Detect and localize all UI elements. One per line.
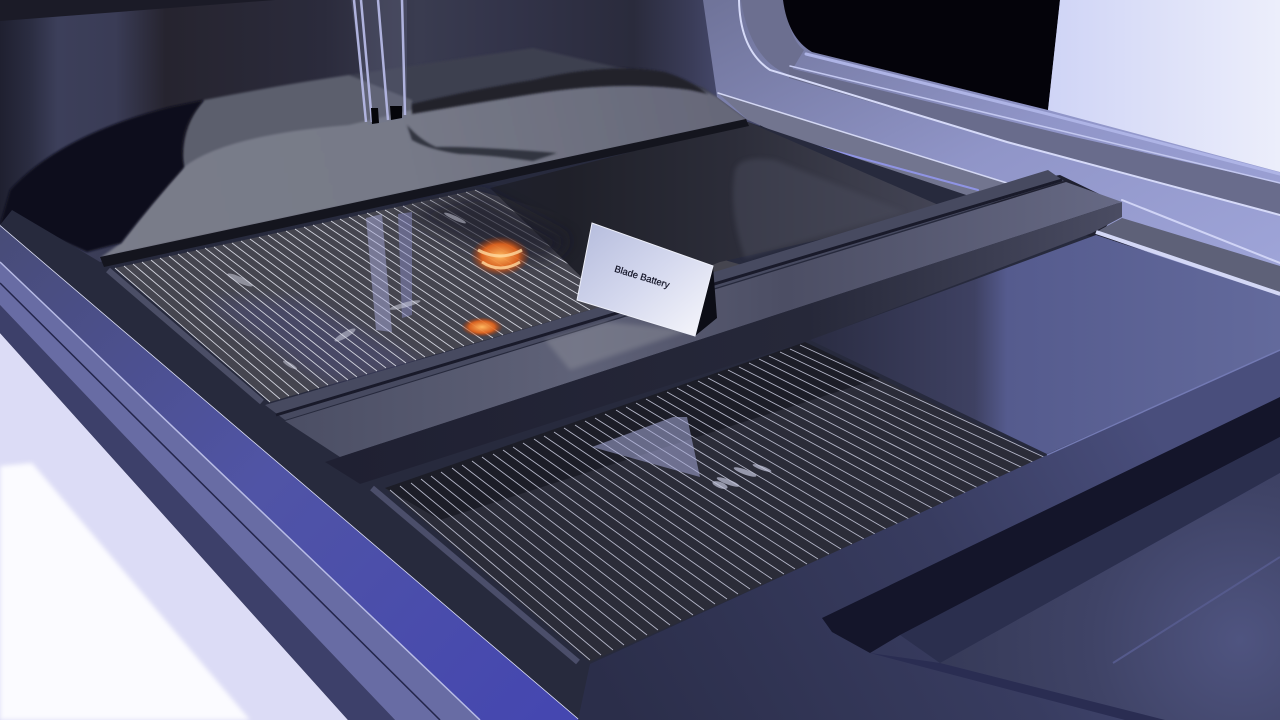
card dark side	[695, 266, 717, 336]
specks	[226, 211, 467, 371]
specks lower	[711, 463, 772, 491]
glass reflection	[733, 159, 905, 258]
frame highlight lines	[0, 225, 580, 720]
back wall	[0, 0, 760, 270]
rear floor dark shadow	[412, 68, 708, 114]
glass tube	[351, 0, 407, 125]
card label: Blade Battery	[613, 264, 671, 291]
panel: upper battery stripes	[115, 190, 760, 402]
crossbar flange	[265, 170, 1064, 420]
reflection of tube	[366, 212, 412, 332]
tube S shadow	[407, 125, 557, 161]
tray interior	[940, 473, 1280, 720]
steel channel	[789, 68, 1280, 215]
panel: lower battery stripes	[385, 342, 1046, 662]
frame band matte	[0, 262, 480, 720]
front surface	[578, 350, 1280, 720]
tray dark wedge	[822, 397, 1280, 653]
bezel beside upper panel	[108, 270, 262, 402]
shadow under bar	[385, 342, 880, 520]
light floor	[100, 72, 748, 258]
right plate	[810, 235, 1280, 454]
dark shadow on the left	[0, 100, 204, 252]
lavender floor	[0, 333, 348, 720]
card reflection	[592, 417, 700, 477]
window	[783, 0, 1060, 110]
crossbar front face	[325, 202, 1122, 484]
ridge highlight	[1047, 350, 1280, 455]
crossbar top face	[285, 182, 1122, 457]
tray shadow	[870, 653, 1165, 720]
crossbar	[265, 170, 1122, 484]
rear floor	[349, 48, 746, 130]
tube base	[371, 108, 379, 124]
orange glow lower	[461, 317, 503, 337]
card face	[577, 223, 713, 336]
crossbar glossy patch	[545, 322, 690, 370]
side strip beside plate	[1096, 218, 1280, 293]
lower stripes	[390, 345, 1046, 660]
white wall	[1048, 0, 1280, 172]
upper dark glass	[490, 122, 950, 305]
bright floor patch	[0, 463, 250, 720]
crossbar groove	[276, 180, 1062, 415]
upper black rim	[100, 119, 749, 267]
purple sheen	[200, 300, 430, 385]
steel ledge	[718, 93, 1007, 210]
frame band outer	[0, 305, 395, 720]
card: Blade Battery	[577, 223, 717, 336]
mid grey disc floor	[183, 75, 412, 175]
dark reflection shadow	[400, 192, 570, 262]
frame band purple	[0, 225, 580, 720]
steel side frame	[703, 0, 1280, 300]
steel curve shade	[741, 0, 804, 75]
tray crease	[1113, 557, 1280, 663]
bezel beside lower panel	[372, 488, 578, 662]
strip highlight	[1096, 232, 1280, 294]
steel highlights	[718, 0, 1280, 263]
tray band	[900, 437, 1280, 663]
shelf edge top left	[0, 0, 275, 21]
orange glow upper	[470, 236, 530, 276]
upper stripes	[115, 190, 658, 402]
